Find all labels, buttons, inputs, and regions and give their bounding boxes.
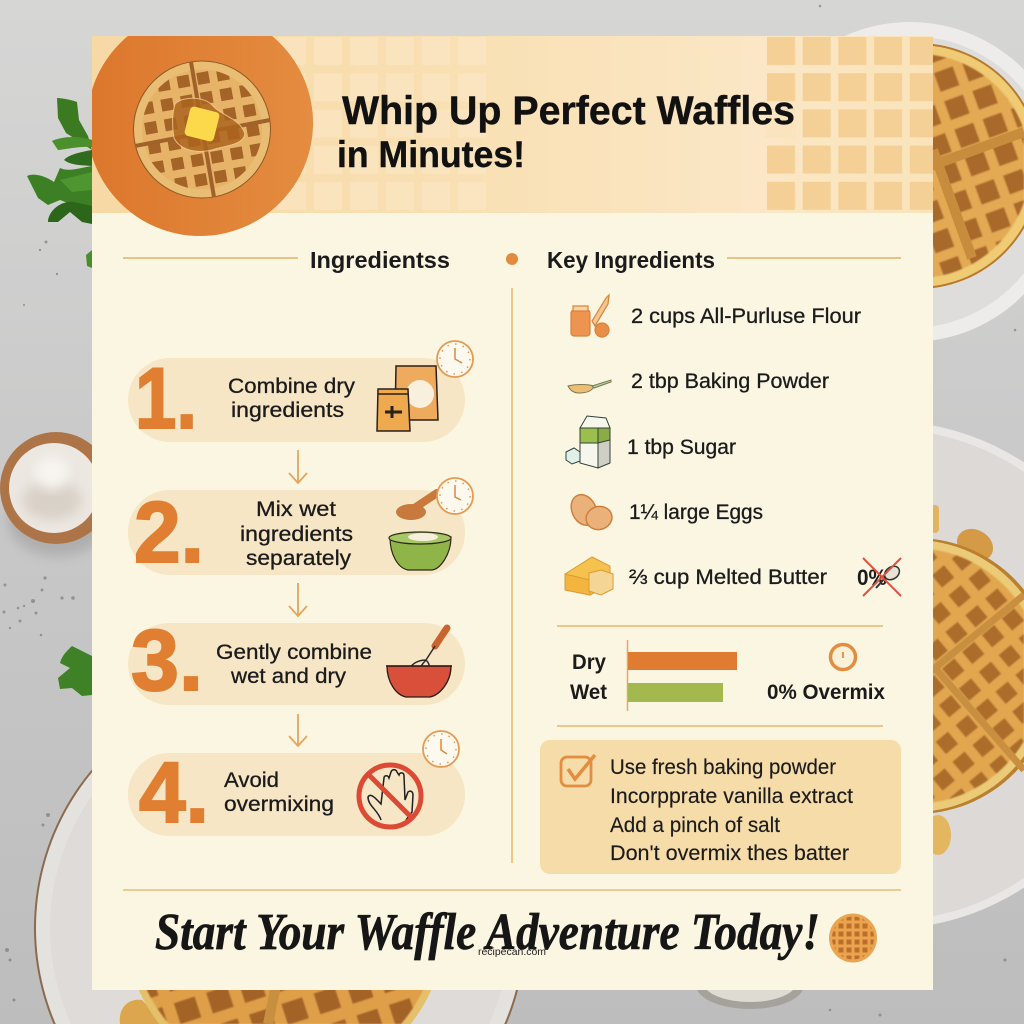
- waffle: lower right: [778, 505, 1024, 855]
- step 1: 1.: [135, 351, 197, 447]
- icon: no overmix whisk: 0%: [857, 565, 887, 590]
- step 3: wet and dry: [230, 665, 347, 688]
- ingredient: sugar: [566, 416, 736, 468]
- icon: clock step 4: [423, 731, 459, 767]
- stat: 0% overmix: 0% Overmix: [767, 681, 885, 704]
- step 1: [128, 351, 465, 447]
- icon: milk carton and cube: [566, 416, 610, 468]
- ingredient: sugar: 1 tbp Sugar: [627, 436, 736, 459]
- panel: tips: [540, 740, 901, 874]
- arrow 3: [289, 714, 307, 746]
- title: [337, 89, 795, 175]
- icon: timer: [830, 644, 856, 670]
- step 3: 3.: [131, 613, 203, 709]
- ingredient: butter: [565, 557, 827, 595]
- watermark: recipecan.com: [478, 947, 546, 958]
- herb: parsley top: [27, 98, 92, 268]
- arrow 2: [289, 583, 307, 616]
- icon: butter: [565, 557, 613, 595]
- salt bowl: [0, 432, 112, 556]
- panel: tips: Use fresh baking powder: [610, 756, 836, 779]
- title: in Minutes!: [337, 134, 525, 175]
- arrow 1: [289, 450, 307, 483]
- panel: tips: Add a pinch of salt: [610, 814, 780, 837]
- icon: no hand: [359, 765, 421, 827]
- step 1: ingredients: [231, 399, 344, 422]
- footer call to action: Start Your Waffle Adventure Today!: [155, 904, 820, 961]
- heading separator dot: [506, 253, 518, 265]
- plate: bottom left: [34, 682, 526, 1024]
- bar chart: dry vs wet: Wet: [570, 681, 607, 704]
- icon: green bowl with spoon: [389, 493, 451, 570]
- glass of milk: [696, 961, 804, 1009]
- step 4: Avoid: [224, 769, 279, 792]
- step 3: Gently combine: [216, 641, 372, 664]
- panel: main card: [87, 10, 933, 990]
- icon: clock step 1: [437, 341, 473, 377]
- icon: checkbox: [561, 755, 595, 786]
- step 3: [128, 613, 465, 709]
- bar chart: dry vs wet: Dry: [572, 651, 606, 674]
- step 2: separately: [246, 547, 352, 570]
- waffle: top right: [795, 43, 1024, 289]
- icon: clock step 2: [437, 478, 473, 514]
- panel: tips: Don't overmix thes batter: [610, 842, 849, 865]
- waffle: bottom: [120, 765, 445, 1024]
- icon: red bowl with whisk: [386, 628, 452, 697]
- step 2: Mix wet: [256, 498, 336, 521]
- step 4: 4.: [139, 745, 209, 841]
- step 2: 2.: [134, 485, 204, 581]
- step 4: [128, 745, 465, 841]
- ingredient: butter: ⅔ cup Melted Butter: [629, 566, 827, 589]
- icon: eggs: [566, 490, 615, 532]
- plate: top right: [750, 22, 1024, 342]
- title: Whip Up Perfect Waffles: [342, 89, 795, 133]
- icon: flour jar: [571, 295, 609, 337]
- step 2: [128, 485, 465, 581]
- header band: [92, 36, 933, 236]
- herb: parsley lower: [58, 646, 92, 696]
- icon: no overmix whisk: [857, 558, 902, 596]
- ingredient: eggs: 1¼ large Eggs: [629, 501, 763, 524]
- ingredient: baking powder: 2 tbp Baking Powder: [631, 370, 829, 393]
- step 4: overmixing: [224, 793, 334, 816]
- icon: header waffle with butter: [133, 60, 271, 198]
- heading: Ingredientss: Ingredientss: [310, 247, 450, 273]
- icon: flour bags: [377, 366, 438, 431]
- heading: Key Ingredients: Key Ingredients: [547, 247, 715, 273]
- bar chart: dry vs wet: [570, 640, 737, 711]
- step 2: ingredients: [240, 523, 353, 546]
- panel: tips: Incorpprate vanilla extract: [610, 785, 853, 808]
- plate: lower right: [631, 421, 1024, 929]
- step 1: Combine dry: [228, 375, 356, 398]
- icon: spoon: [568, 380, 611, 393]
- ingredient: flour: 2 cups All-Purluse Flour: [631, 305, 861, 328]
- ingredient: flour: [571, 295, 861, 337]
- ingredient: eggs: [566, 490, 763, 532]
- icon: small waffle: [829, 914, 877, 962]
